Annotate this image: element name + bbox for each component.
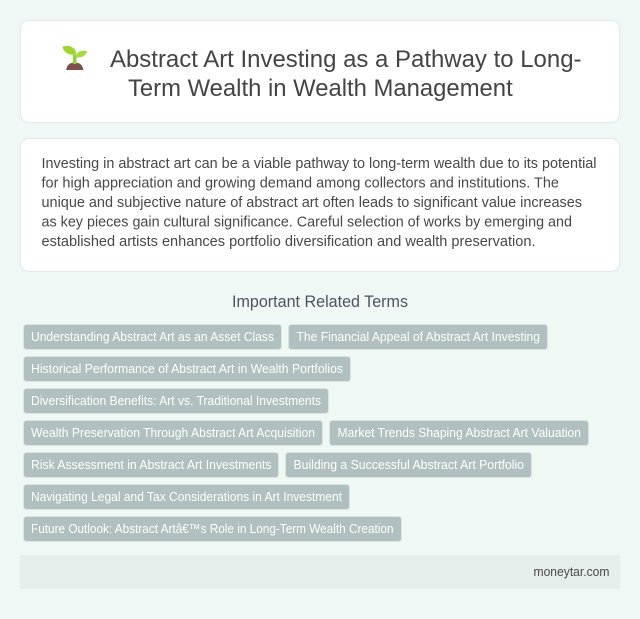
chip: financial appeal: The Financial Appeal of Abstract Art Investing [296, 329, 540, 344]
title: Term Wealth in Wealth Management [128, 75, 513, 102]
chip: risk assessment: Risk Assessment in Abstract Art Investments [31, 457, 272, 472]
term chips [24, 324, 588, 542]
summary text: unique and subjective nature of abstract art often leads to significant value increases [42, 194, 582, 211]
heading: important related terms: Important Related Terms [232, 293, 408, 311]
icon: sprout [62, 46, 87, 70]
summary text: for high appreciation and growing demand among collectors and institutions. The [42, 175, 559, 192]
summary text: Investing in abstract art can be a viable pathway to long-term wealth due to its potential [42, 155, 596, 172]
chip: legal and tax [24, 484, 350, 510]
summary panel [20, 138, 620, 272]
chip: future outlook [24, 516, 402, 542]
chip: wealth preservation [24, 420, 322, 446]
title [110, 46, 582, 102]
chip: building a portfolio: Building a Successful Abstract Art Portfolio [294, 457, 524, 472]
chip: market trends [330, 420, 588, 446]
footer bar [20, 555, 620, 589]
summary text [42, 155, 596, 250]
chip: understanding abstract art: Understanding Abstract Art as an Asset Class [31, 329, 274, 344]
header panel [20, 20, 620, 122]
chip: risk assessment [24, 452, 278, 478]
chip: historical performance [24, 356, 350, 382]
title: Abstract Art Investing as a Pathway to Long- [110, 46, 582, 73]
chip: wealth preservation: Wealth Preservation Through Abstract Art Acquisition [31, 425, 315, 440]
chip: market trends: Market Trends Shaping Abstract Art Valuation [338, 425, 581, 440]
chip: building a portfolio [286, 452, 532, 478]
chip: legal and tax: Navigating Legal and Tax Considerations in Art Investment [31, 489, 342, 504]
chip: diversification benefits [24, 388, 328, 414]
chip: future outlook: Future Outlook: Abstract Artâ€™s Role in Long-Term Wealth Creation [31, 521, 394, 536]
chip: historical performance: Historical Performance of Abstract Art in Wealth Portfolios [31, 361, 343, 376]
chip: diversification benefits: Diversification Benefits: Art vs. Traditional Investments [31, 393, 321, 408]
footer source text: moneytar.com [534, 564, 610, 579]
summary text: established artists enhances portfolio diversification and wealth preservation. [42, 233, 536, 250]
chip: financial appeal [288, 324, 548, 350]
summary text: as key pieces gain cultural significance. Careful selection of works by emerging and [42, 214, 572, 231]
chip: understanding abstract art [24, 324, 282, 350]
